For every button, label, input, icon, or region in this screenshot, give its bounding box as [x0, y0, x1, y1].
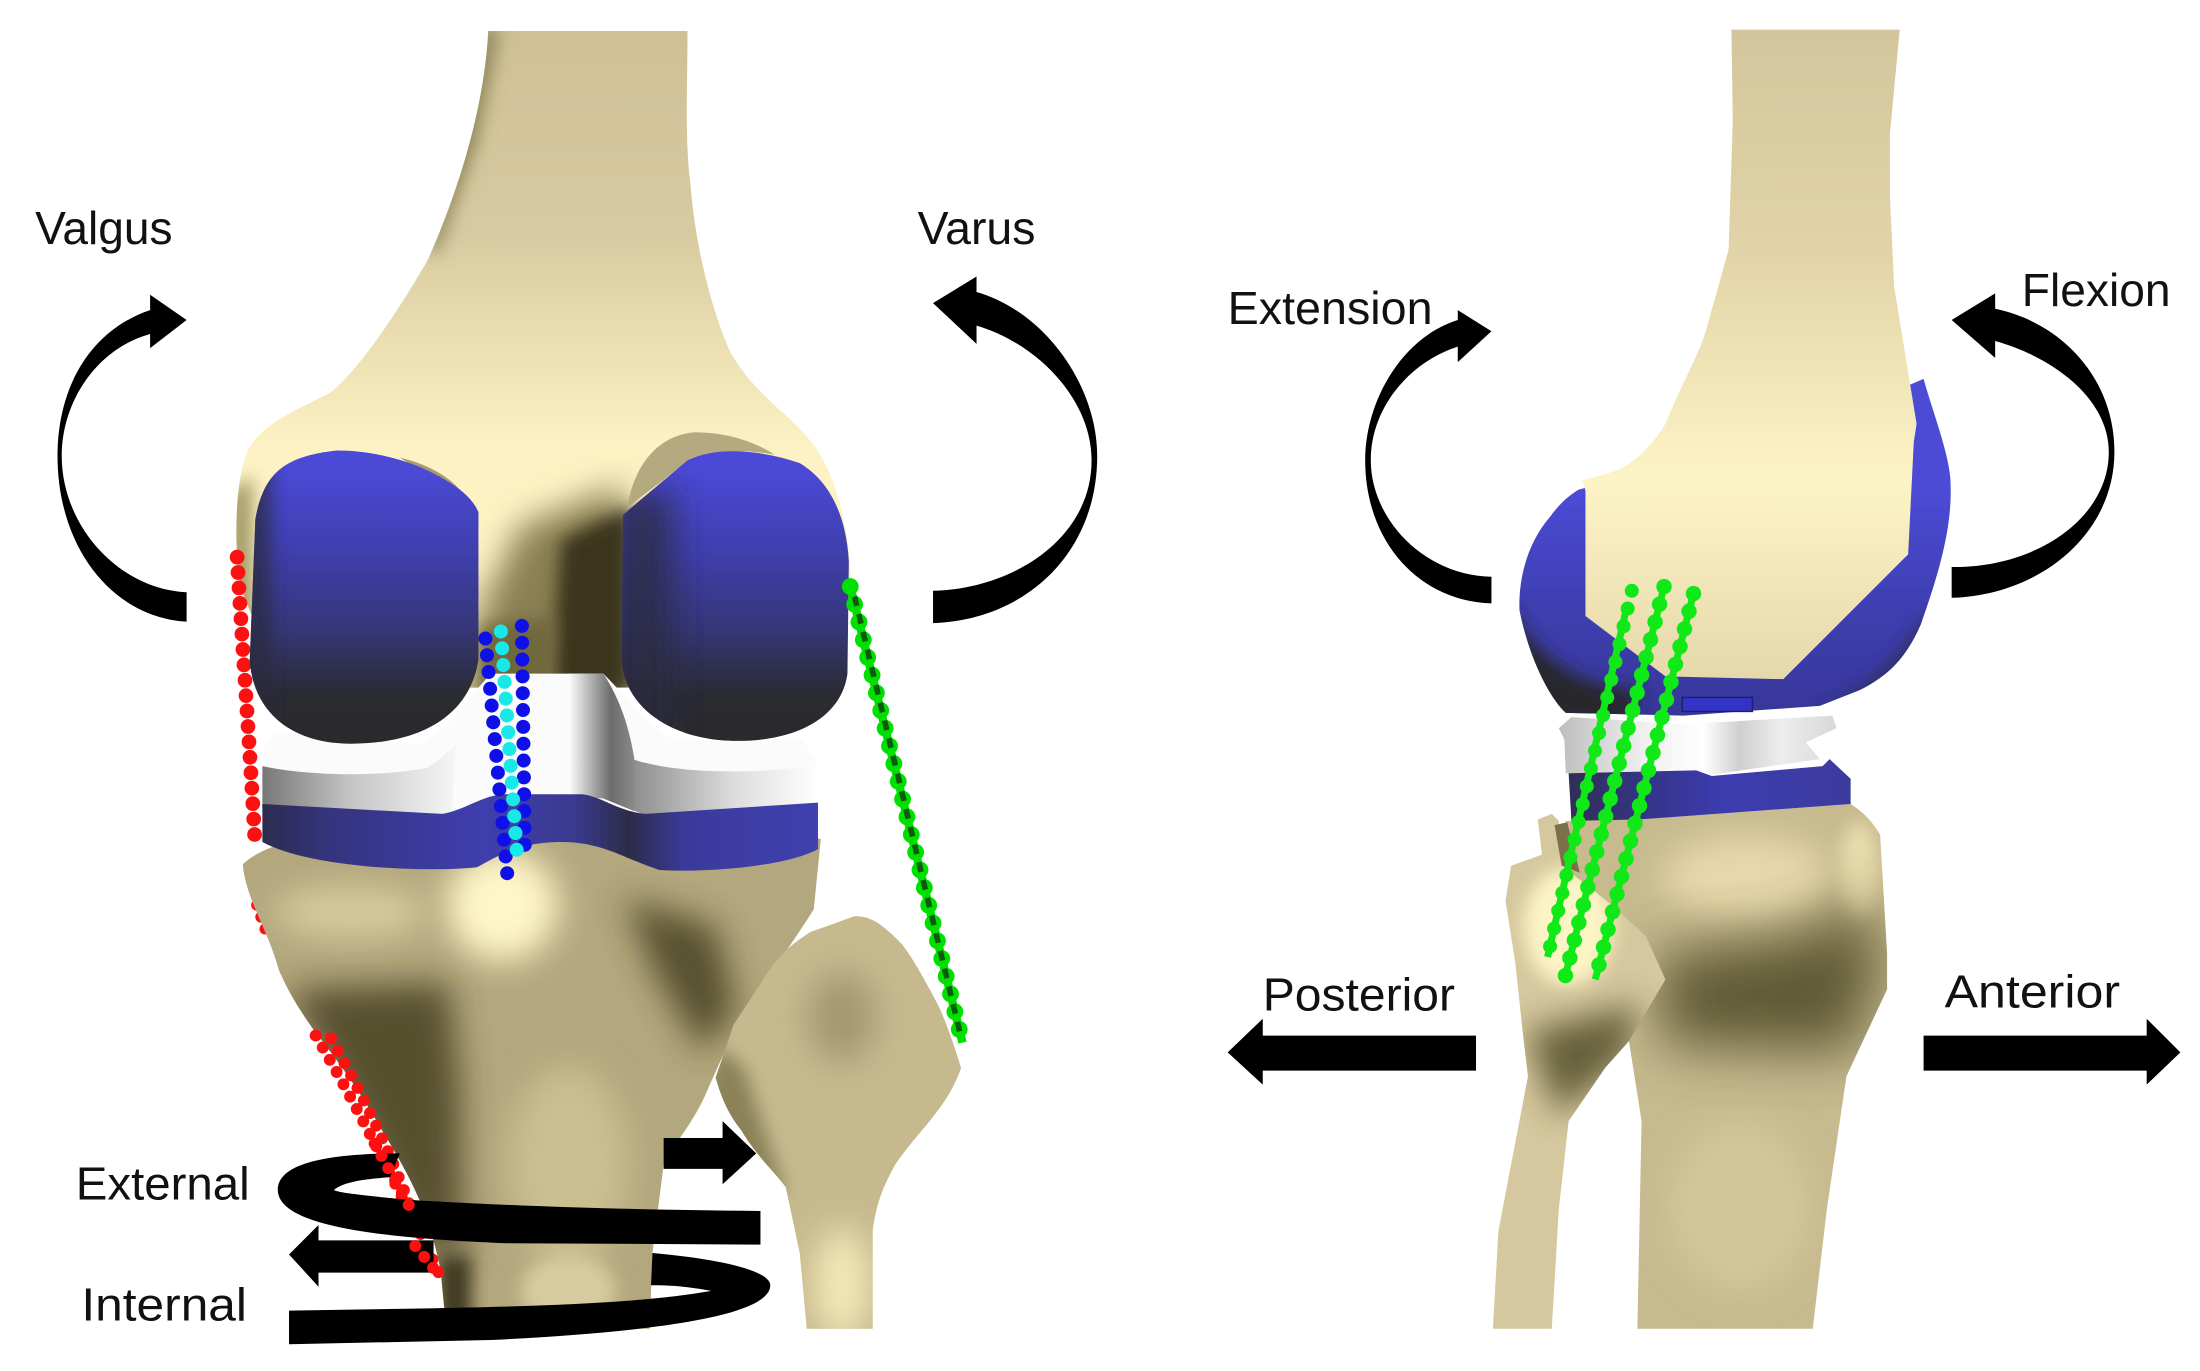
label: External: External — [76, 1158, 250, 1210]
femur side view — [1583, 30, 1917, 679]
femoral component right condyle — [610, 451, 849, 751]
lateral ligaments side view — [1548, 587, 1693, 979]
cruciate ligament blue left — [485, 638, 508, 881]
tibial tray side view — [1569, 759, 1851, 821]
fibula front view — [702, 916, 961, 1340]
lateral collateral ligament — [850, 587, 962, 1043]
label: Anterior: Anterior — [1945, 966, 2120, 1018]
tibial tray blue — [262, 794, 818, 871]
arrow: posterior — [1228, 1019, 1476, 1085]
arrow: internal rotation coil — [289, 1225, 770, 1344]
cruciate ligament cyan — [501, 631, 518, 864]
medial collateral ligament — [237, 557, 268, 937]
label: Extension: Extension — [1228, 282, 1433, 334]
arrow: varus — [933, 277, 1097, 623]
label: Flexion: Flexion — [2022, 264, 2171, 316]
label: Valgus: Valgus — [35, 202, 173, 254]
arrow: valgus — [58, 295, 187, 622]
femoral component side view — [1508, 379, 1957, 723]
distal medial ligament — [316, 1036, 441, 1277]
fibula side view — [1493, 814, 1665, 1329]
tibia front view — [243, 828, 821, 1333]
arrow: external rotation coil — [278, 1121, 760, 1245]
femur front view — [224, 28, 852, 702]
panel: front view of knee — [35, 28, 1097, 1344]
cruciate ligament blue right — [522, 626, 525, 845]
label: Internal: Internal — [81, 1278, 247, 1330]
tibial insert white — [262, 674, 818, 817]
arrow: extension — [1365, 310, 1491, 603]
arrow: anterior — [1924, 1019, 2180, 1085]
arrow: flexion — [1952, 293, 2114, 598]
arrows varus and valgus — [58, 277, 1097, 623]
label: Posterior: Posterior — [1263, 968, 1455, 1020]
femoral component left condyle — [232, 449, 478, 751]
ligament over coil — [375, 1144, 441, 1277]
panel: side view of knee — [1228, 30, 2180, 1329]
tibia side view — [1566, 804, 1887, 1329]
tibial insert side view — [1559, 716, 1837, 775]
label: Varus: Varus — [918, 202, 1035, 254]
